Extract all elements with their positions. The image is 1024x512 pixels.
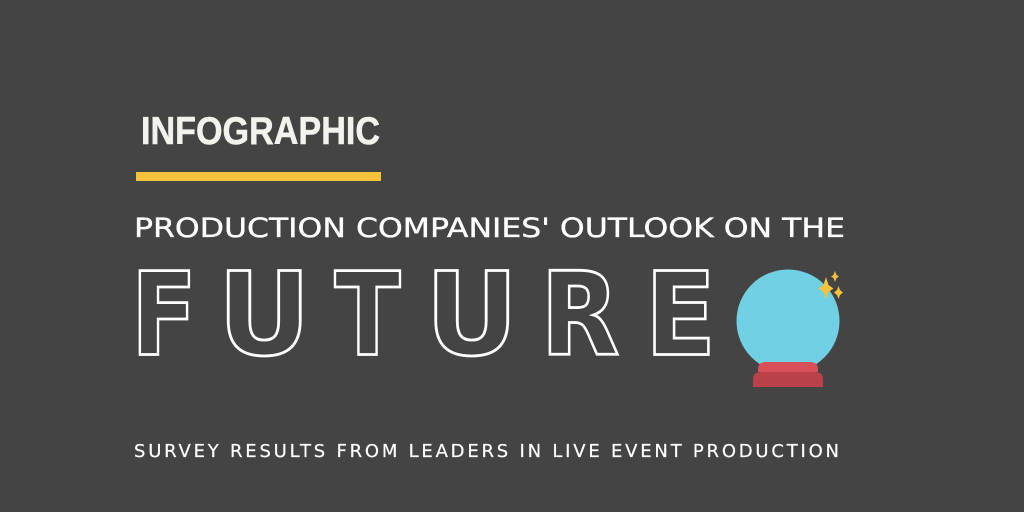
label: infographic: INFOGRAPHIC [141, 110, 380, 153]
title: future outlined letters [131, 248, 716, 382]
title: future outlined letters: U [425, 248, 518, 382]
icon: crystal ball [736, 270, 843, 387]
title: future outlined letters: T [334, 248, 400, 382]
title: future outlined letters: F [131, 248, 197, 382]
title: future outlined letters: E [645, 248, 716, 382]
title: future outlined letters: R [540, 248, 620, 382]
subtitle: SURVEY RESULTS FROM LEADERS IN LIVE EVENT PRODUCTION [134, 441, 839, 462]
heading: PRODUCTION COMPANIES' OUTLOOK ON THE [134, 213, 845, 244]
title: future outlined letters: U [218, 248, 311, 382]
yellow accent bar [136, 172, 381, 181]
